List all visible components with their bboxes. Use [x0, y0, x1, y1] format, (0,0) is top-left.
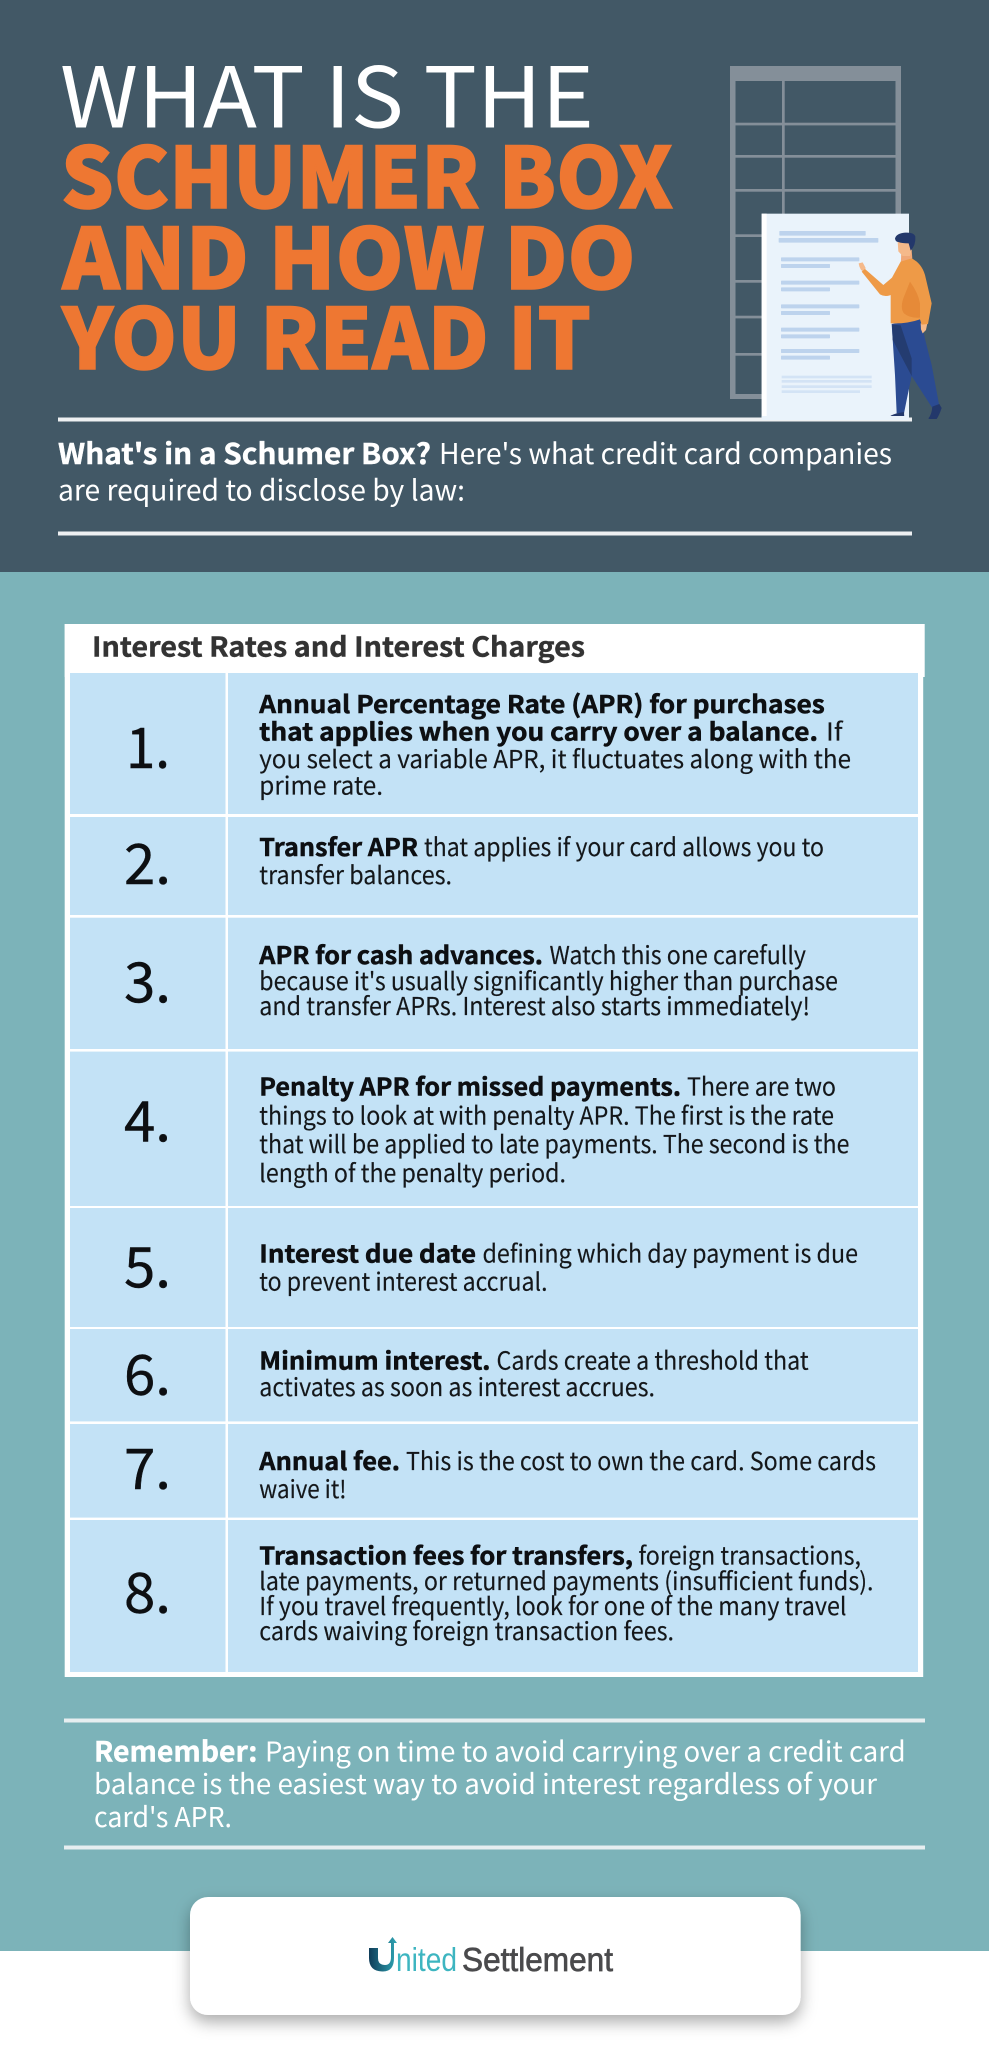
- row 2: 2.: [124, 820, 171, 901]
- heading: table title: Interest Rates and Interest Charges: [92, 626, 585, 664]
- row 1: you select a variable APR, it fluctuates along with the: [259, 741, 851, 776]
- row 5: defining which day payment is due: [482, 1236, 858, 1271]
- title: AND HOW DO: [61, 193, 636, 314]
- icon: document foot over rule: [762, 416, 909, 420]
- row 1: 1.: [126, 704, 170, 785]
- row 8: [70, 1520, 918, 1672]
- row 2: transfer balances.: [259, 857, 452, 892]
- divider: header bottom rule: [58, 532, 912, 536]
- row 1: If: [826, 714, 844, 749]
- title: SCHUMER BOX: [61, 112, 673, 233]
- logo: United Settlement: Settlement: [462, 1941, 613, 1978]
- text block: intro: What's in a Schumer Box?: [58, 432, 431, 473]
- row 5: [70, 1208, 918, 1327]
- callout: remember: balance is the easiest way to avoid interest regardless of your: [94, 1762, 877, 1802]
- row 1: [70, 673, 918, 814]
- row 5: Interest due date: [259, 1236, 476, 1271]
- divider: header top rule: [58, 418, 912, 422]
- row 3: [70, 918, 918, 1049]
- row 7: Annual fee.: [258, 1443, 400, 1478]
- row 2: that applies if your card allows you to: [424, 829, 824, 864]
- row 4: things to look at with penalty APR. The first is the rate: [259, 1098, 834, 1133]
- title: YOU READ IT: [61, 273, 591, 394]
- panel: interest rates table: [65, 624, 925, 1677]
- row 8: cards waiving foreign transaction fees.: [259, 1613, 674, 1648]
- illustration: person pointing at document: [730, 66, 942, 420]
- text block: intro: are required to disclose by law:: [58, 468, 465, 510]
- logo: United Settlement: [369, 1937, 613, 1978]
- row 8: late payments, or returned payments (insufficient funds).: [259, 1563, 874, 1598]
- panel: header: [0, 0, 989, 572]
- row 3: and transfer APRs. Interest also starts immediately!: [259, 988, 810, 1023]
- row 8: Transaction fees for transfers,: [259, 1538, 633, 1572]
- row 1: prime rate.: [259, 768, 383, 803]
- row 8: foreign transactions,: [638, 1538, 861, 1572]
- row 6: 6.: [124, 1331, 171, 1412]
- row 7: [70, 1424, 918, 1518]
- row 4: 4.: [124, 1078, 171, 1159]
- row 1: Annual Percentage Rate (APR) for purchases: [258, 686, 825, 721]
- row 4: that will be applied to late payments. The second is the: [259, 1126, 849, 1161]
- callout: remember: card's APR.: [94, 1795, 232, 1835]
- text block: intro: [58, 432, 892, 510]
- row 2: Transfer APR: [259, 829, 418, 864]
- row 3: 3.: [124, 939, 171, 1020]
- row 5: to prevent interest accrual.: [259, 1263, 548, 1298]
- row 6: [70, 1329, 918, 1421]
- row 6: activates as soon as interest accrues.: [259, 1369, 655, 1404]
- row 5: 5.: [124, 1224, 171, 1304]
- row 8: 8.: [124, 1549, 171, 1630]
- row 4: [70, 1052, 918, 1206]
- title: WHAT IS THE: [60, 32, 594, 152]
- row 4: length of the penalty period.: [259, 1155, 566, 1190]
- callout: remember: Remember:: [94, 1730, 258, 1770]
- text block: intro: Here's what credit card companies: [439, 432, 892, 473]
- row 7: 7.: [124, 1425, 171, 1506]
- row 2: [70, 817, 918, 915]
- title: [60, 32, 673, 394]
- row 4: Penalty APR for missed payments.: [259, 1068, 681, 1104]
- icon: person: [859, 233, 942, 419]
- row 8: If you travel frequently, look for one of the many travel: [259, 1588, 846, 1623]
- icon: logo U with arrow: [369, 1937, 397, 1972]
- logo card: [190, 1897, 801, 2015]
- row 7: waive it!: [259, 1471, 346, 1506]
- row 3: because it's usually significantly higher than purchase: [259, 963, 838, 998]
- row 1: that applies when you carry over a balance.: [259, 714, 818, 749]
- row 6: Cards create a threshold that: [496, 1343, 809, 1378]
- icon: background table grid: [730, 66, 901, 399]
- icon: document: [762, 214, 909, 420]
- row 3: APR for cash advances.: [258, 937, 543, 972]
- background: teal section: [0, 572, 989, 1951]
- row 6: Minimum interest.: [259, 1343, 490, 1378]
- row 4: There are two: [687, 1068, 836, 1104]
- row 7: This is the cost to own the card. Some cards: [406, 1443, 876, 1478]
- callout: remember: [64, 1718, 925, 1850]
- row 3: Watch this one carefully: [550, 937, 806, 972]
- callout: remember: Paying on time to avoid carrying over a credit card: [265, 1730, 906, 1770]
- logo: United Settlement: nited: [396, 1941, 457, 1978]
